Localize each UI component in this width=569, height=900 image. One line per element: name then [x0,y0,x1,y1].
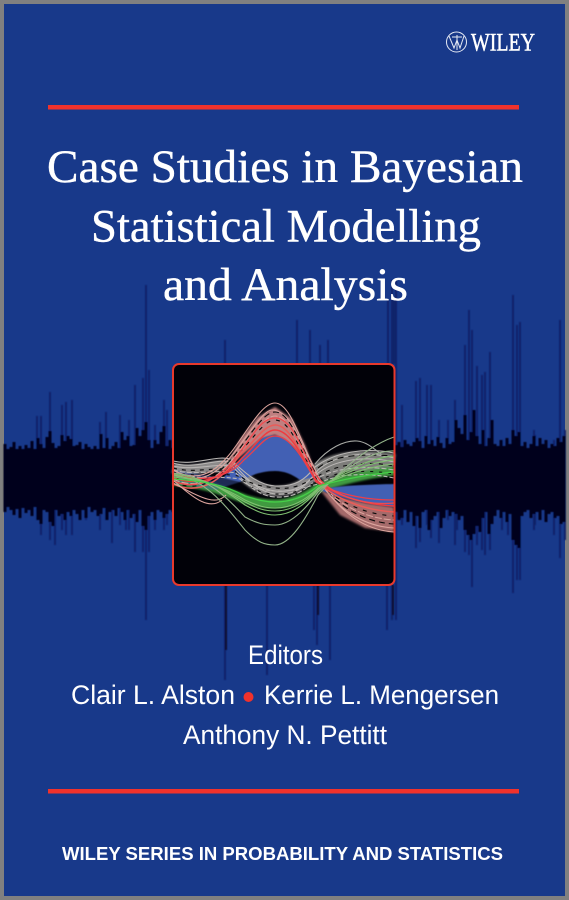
chart: texture underlays [173,407,394,532]
wordmark: WILEY [471,30,535,56]
editors: Editors [248,640,323,670]
series name: WILEY SERIES IN PROBABILITY AND STATISTICS [62,844,503,864]
icon: wiley emblem [446,32,466,52]
editors: Kerrie L. Mengersen [264,680,499,710]
waveform band [4,280,565,680]
bottom rule [48,789,519,794]
editors [71,640,499,750]
chart: grey curves [173,441,394,497]
title [47,141,523,311]
chart: pink and red curves [173,403,394,532]
chart: blue density areas [173,436,394,507]
top rule [48,105,519,110]
title: Statistical Modelling [91,200,481,252]
panel background [173,364,394,585]
panel border [173,364,394,585]
title: Case Studies in Bayesian [47,141,523,193]
separator dot [244,692,254,702]
editors: Clair L. Alston [71,680,235,710]
publisher logo [446,30,535,56]
title: and Analysis [163,259,408,311]
editors: Anthony N. Pettitt [183,720,388,750]
chart: green curves [173,437,394,545]
chart panel [173,364,394,585]
